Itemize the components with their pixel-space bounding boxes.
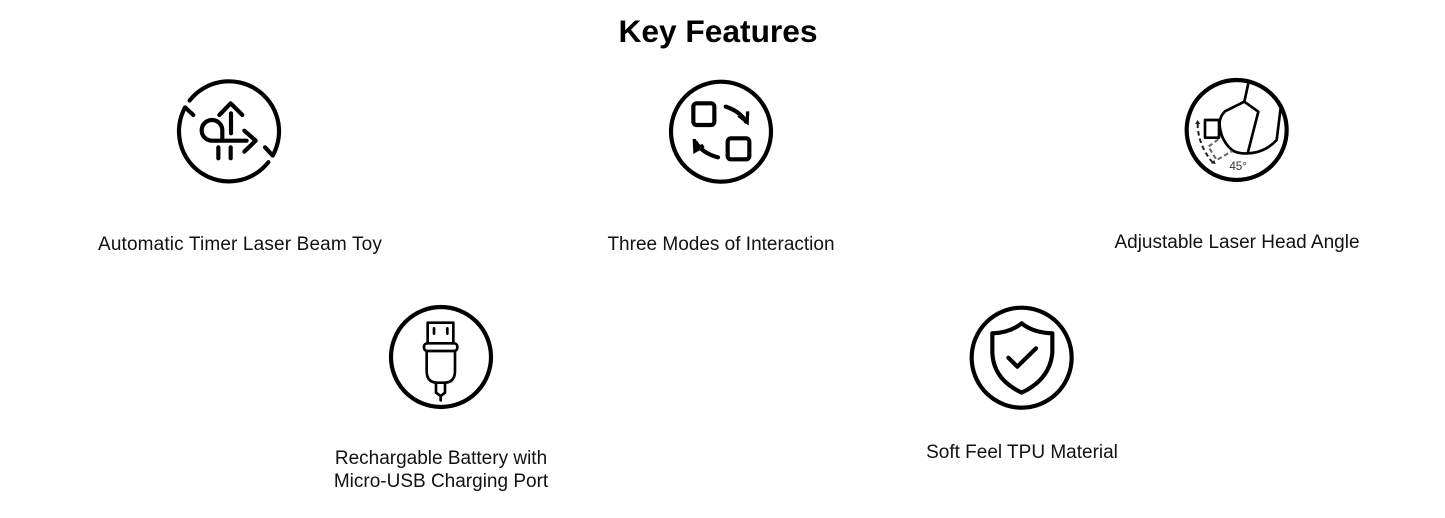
label: Micro-USB Charging Port <box>334 471 548 492</box>
title: Key Features <box>618 13 818 49</box>
icon: timer with laser arrows <box>176 79 282 184</box>
panel: three modes of interaction <box>607 80 835 255</box>
label: Three Modes of Interaction <box>607 234 835 255</box>
icon: shield with check <box>970 306 1074 410</box>
label <box>334 448 548 492</box>
label: Soft Feel TPU Material <box>926 442 1118 463</box>
icon: laser head with 45 degree angle: 45° <box>1229 160 1247 173</box>
panel: soft feel TPU material <box>926 306 1118 463</box>
label: Automatic Timer Laser Beam Toy <box>98 234 382 255</box>
icon: USB plug <box>388 304 494 410</box>
panel: adjustable laser head angle <box>1114 78 1360 253</box>
icon: modes cycle <box>668 80 774 184</box>
label: Rechargable Battery with <box>335 448 547 469</box>
panel: rechargeable battery <box>334 304 548 492</box>
panel: automatic timer laser beam toy <box>98 79 382 255</box>
label: Adjustable Laser Head Angle <box>1114 232 1360 253</box>
icon: laser head with 45 degree angle <box>1184 78 1289 182</box>
